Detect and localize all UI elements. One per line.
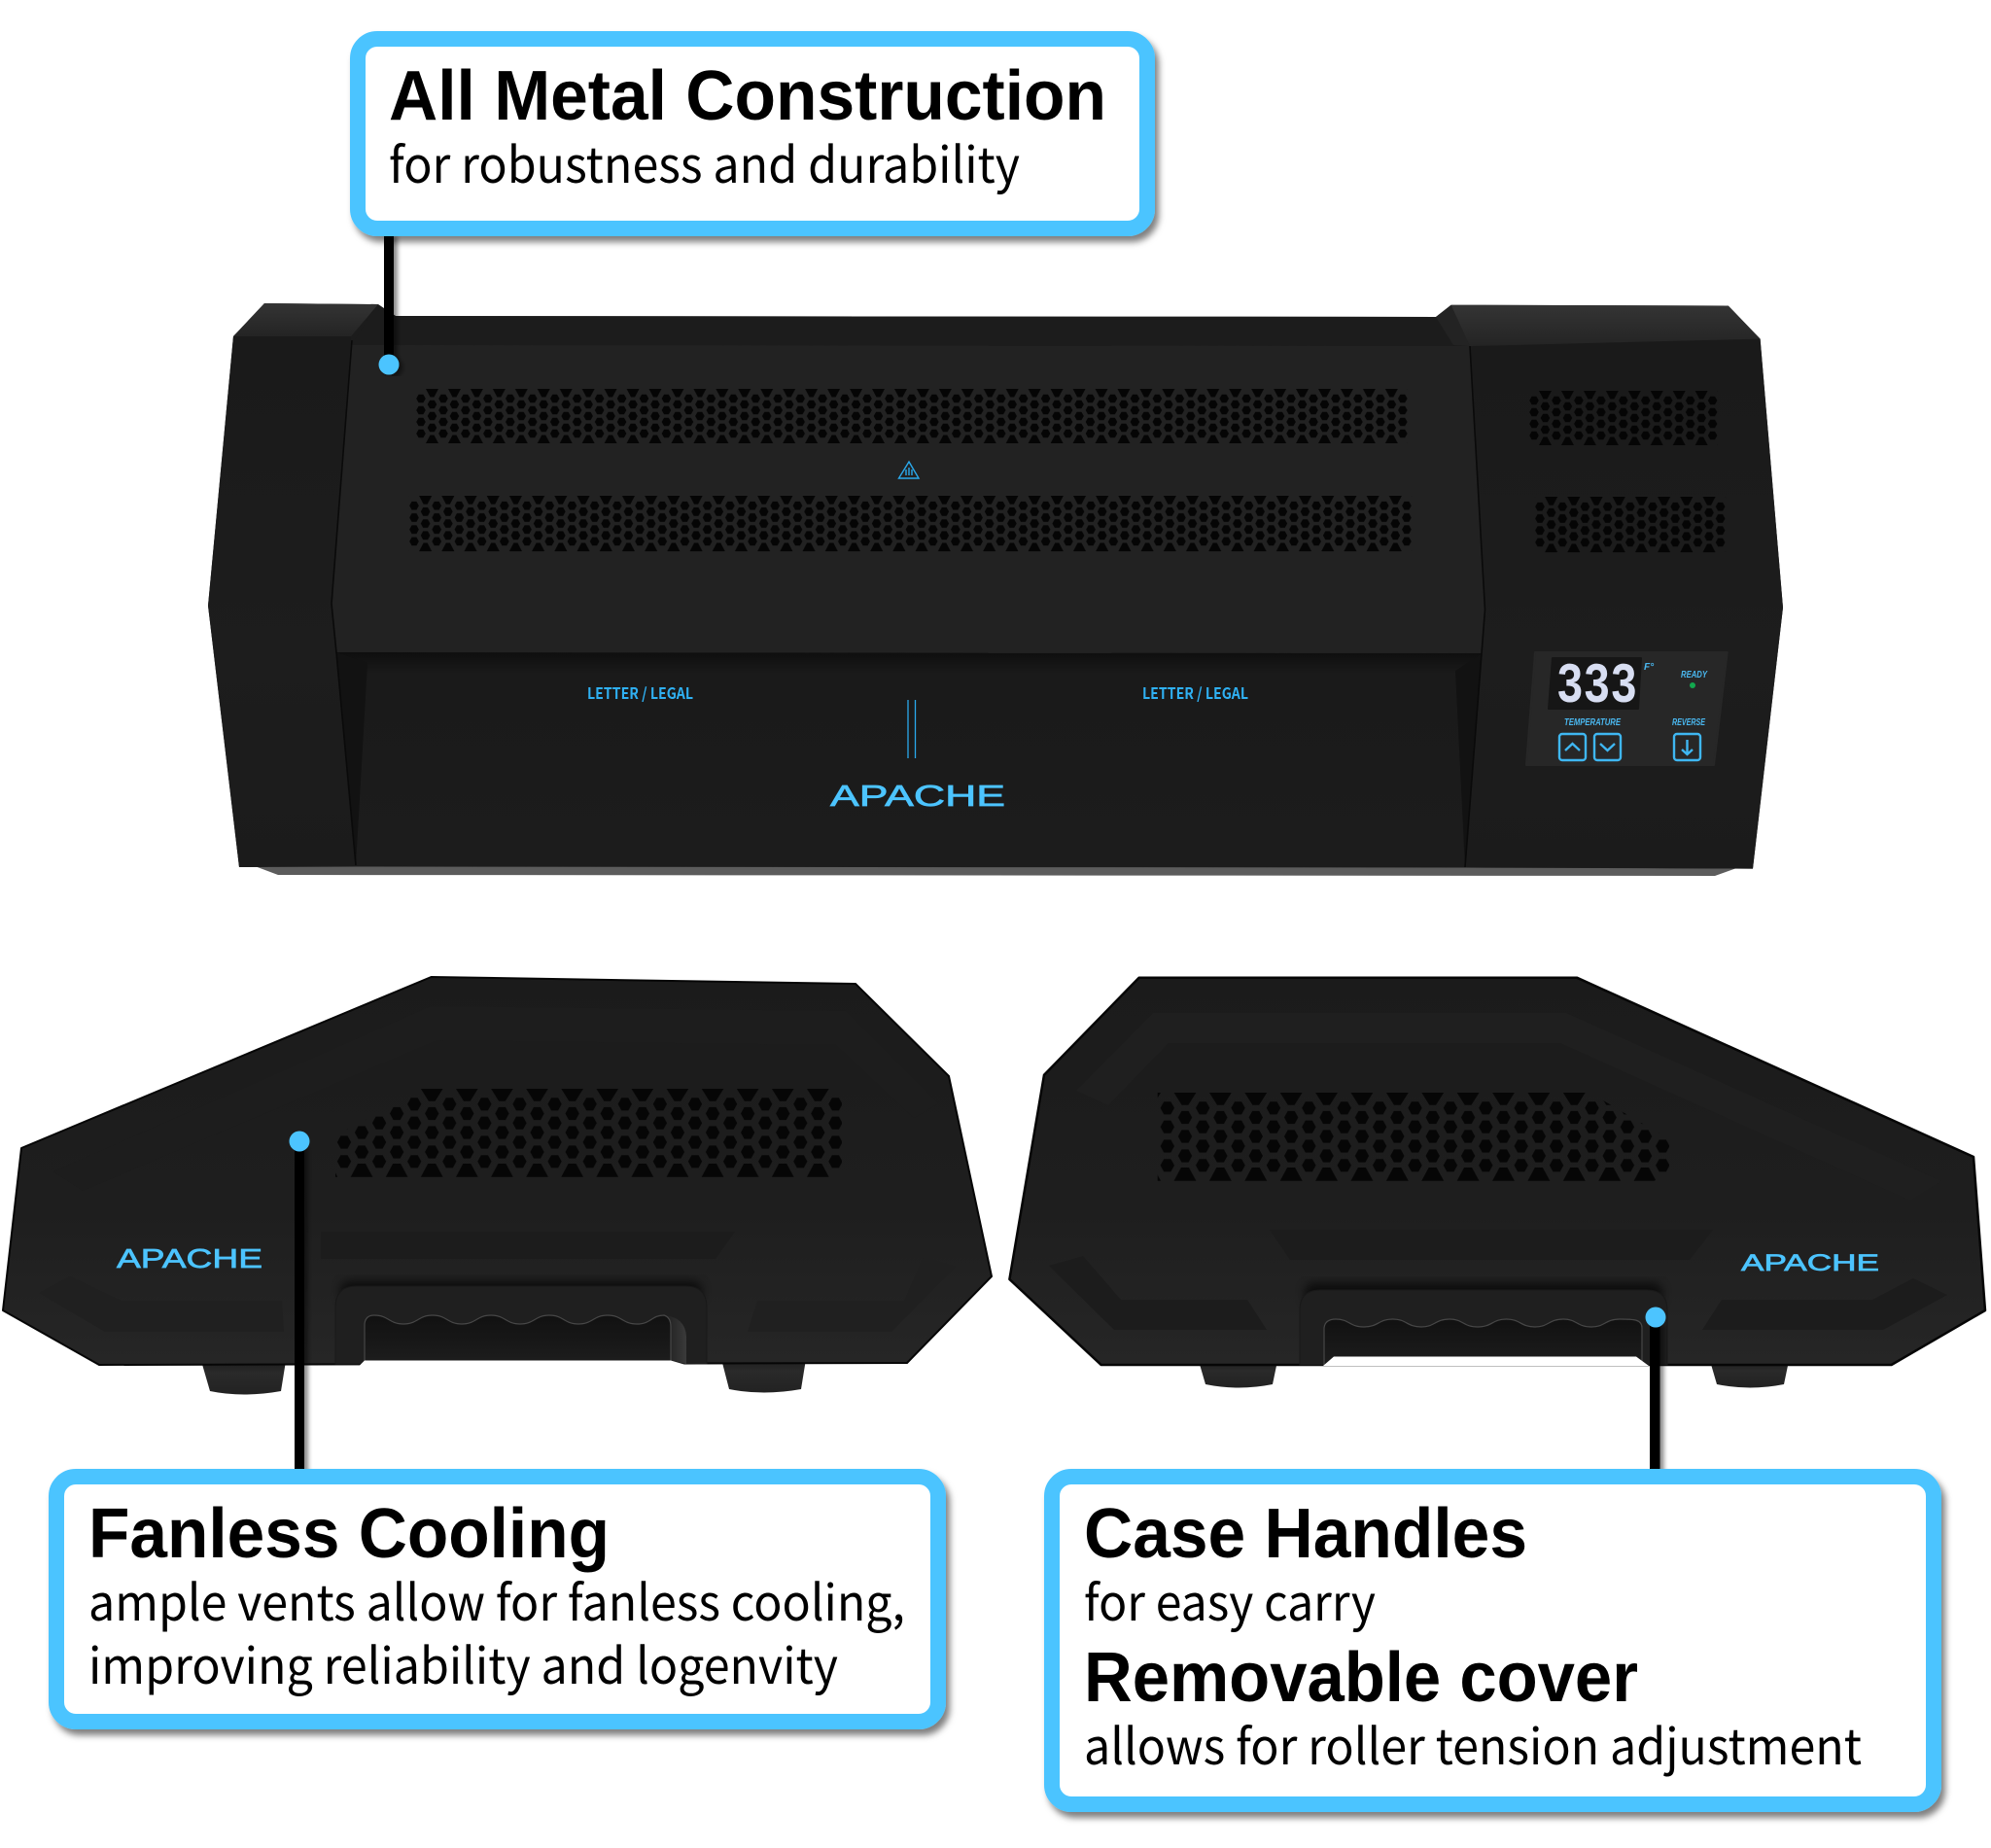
left foot rear <box>721 1359 806 1392</box>
brand logo front: APACHE <box>830 780 1005 813</box>
reverse button <box>1674 734 1700 760</box>
handle grip opening <box>365 1315 671 1364</box>
up button <box>1559 734 1586 760</box>
upper cover vent <box>416 389 1408 443</box>
base strip <box>239 860 1753 876</box>
lower left panel <box>39 1276 284 1332</box>
case handle <box>335 1286 707 1365</box>
right pillar edge <box>1465 346 1485 867</box>
ready label: READY <box>1681 670 1708 680</box>
front view of laminator <box>208 303 1783 876</box>
description line 2: improving reliability and logenvity <box>88 1626 838 1698</box>
side vent <box>334 1089 850 1178</box>
temperature label: TEMPERATURE <box>1564 717 1621 728</box>
line <box>384 233 394 362</box>
right upper vent <box>1529 391 1718 445</box>
icon: heat warning triangle <box>898 462 919 478</box>
right top cap <box>1451 305 1761 346</box>
handle body <box>335 1286 707 1364</box>
handle recess shadow <box>1305 1283 1662 1305</box>
panel plate <box>1526 652 1728 765</box>
line <box>1650 1322 1660 1472</box>
leader line: fanless cooling <box>290 1132 309 1472</box>
lower right panel <box>748 1257 956 1332</box>
right pillar <box>1465 339 1783 869</box>
handle notch <box>360 1361 687 1365</box>
feed tray <box>336 652 1483 867</box>
lower center panel <box>321 1232 735 1259</box>
callout: all metal construction <box>358 39 1147 228</box>
callout: fanless cooling <box>56 1477 938 1722</box>
leader line: case handles <box>1645 1307 1666 1472</box>
paper size label right: LETTER / LEGAL <box>1142 680 1248 704</box>
dot <box>379 354 399 375</box>
right view foot right <box>1710 1361 1789 1388</box>
description: case handles: for easy carry <box>1084 1563 1376 1635</box>
handle side lip <box>664 1315 686 1364</box>
description: removable cover: allows for roller tension adjustment <box>1084 1707 1862 1779</box>
dot <box>290 1132 309 1151</box>
side body <box>3 977 992 1365</box>
lower left panel <box>1049 1256 1267 1330</box>
right lower vent <box>1535 497 1726 552</box>
line <box>295 1145 304 1472</box>
lower right panel <box>1702 1278 1947 1330</box>
handle body <box>1300 1290 1667 1365</box>
dot <box>1645 1307 1666 1328</box>
degree unit: F° <box>1644 662 1655 673</box>
left foot front <box>201 1361 286 1394</box>
top raised band <box>1076 1013 1941 1201</box>
left pillar <box>208 336 356 867</box>
heading: case handles: Case Handles <box>1084 1495 1527 1573</box>
heading: removable cover: Removable cover <box>1084 1639 1638 1717</box>
paper size label left: LETTER / LEGAL <box>587 680 693 704</box>
brand logo: APACHE <box>117 1243 262 1273</box>
description line 1: ample vents allow for fanless cooling, <box>88 1563 905 1635</box>
handle recess shadow <box>340 1281 702 1303</box>
callout frame <box>358 39 1147 228</box>
right cap slope <box>1436 305 1470 346</box>
callout: case handles and removable cover <box>1052 1477 1934 1804</box>
left top cap <box>233 303 378 336</box>
side body <box>1009 978 1985 1365</box>
lower cover vent <box>409 496 1412 551</box>
left pillar edge <box>332 340 356 865</box>
ready LED <box>1690 682 1695 688</box>
left side view of laminator <box>3 977 992 1394</box>
case handle <box>1300 1290 1667 1366</box>
tray left shade <box>336 652 367 865</box>
callout frame <box>1052 1477 1934 1804</box>
machine silhouette backing <box>208 303 1783 869</box>
heading: All Metal Construction <box>389 57 1106 135</box>
handle notch <box>1323 1357 1649 1366</box>
top raised band <box>53 1006 938 1191</box>
right side view of laminator <box>1009 978 1985 1388</box>
brand logo: APACHE <box>1741 1250 1879 1276</box>
top plane <box>351 309 1470 346</box>
reverse label: REVERSE <box>1672 717 1705 728</box>
right view foot left <box>1199 1361 1277 1388</box>
lower center panel <box>1270 1230 1713 1260</box>
side vent <box>1158 1093 1677 1182</box>
heading: Fanless Cooling <box>88 1495 610 1573</box>
center feed mark <box>908 700 916 758</box>
subheading: for robustness and durability <box>389 125 1020 197</box>
callout frame <box>56 1477 938 1722</box>
leader line: metal construction <box>379 233 399 375</box>
display digits: 333 <box>1556 656 1637 719</box>
temperature display <box>1549 658 1641 709</box>
handle grip opening <box>1324 1319 1642 1365</box>
cover <box>332 345 1485 653</box>
control panel <box>1526 652 1728 765</box>
tray right shade <box>1455 653 1483 867</box>
down button <box>1594 734 1621 760</box>
